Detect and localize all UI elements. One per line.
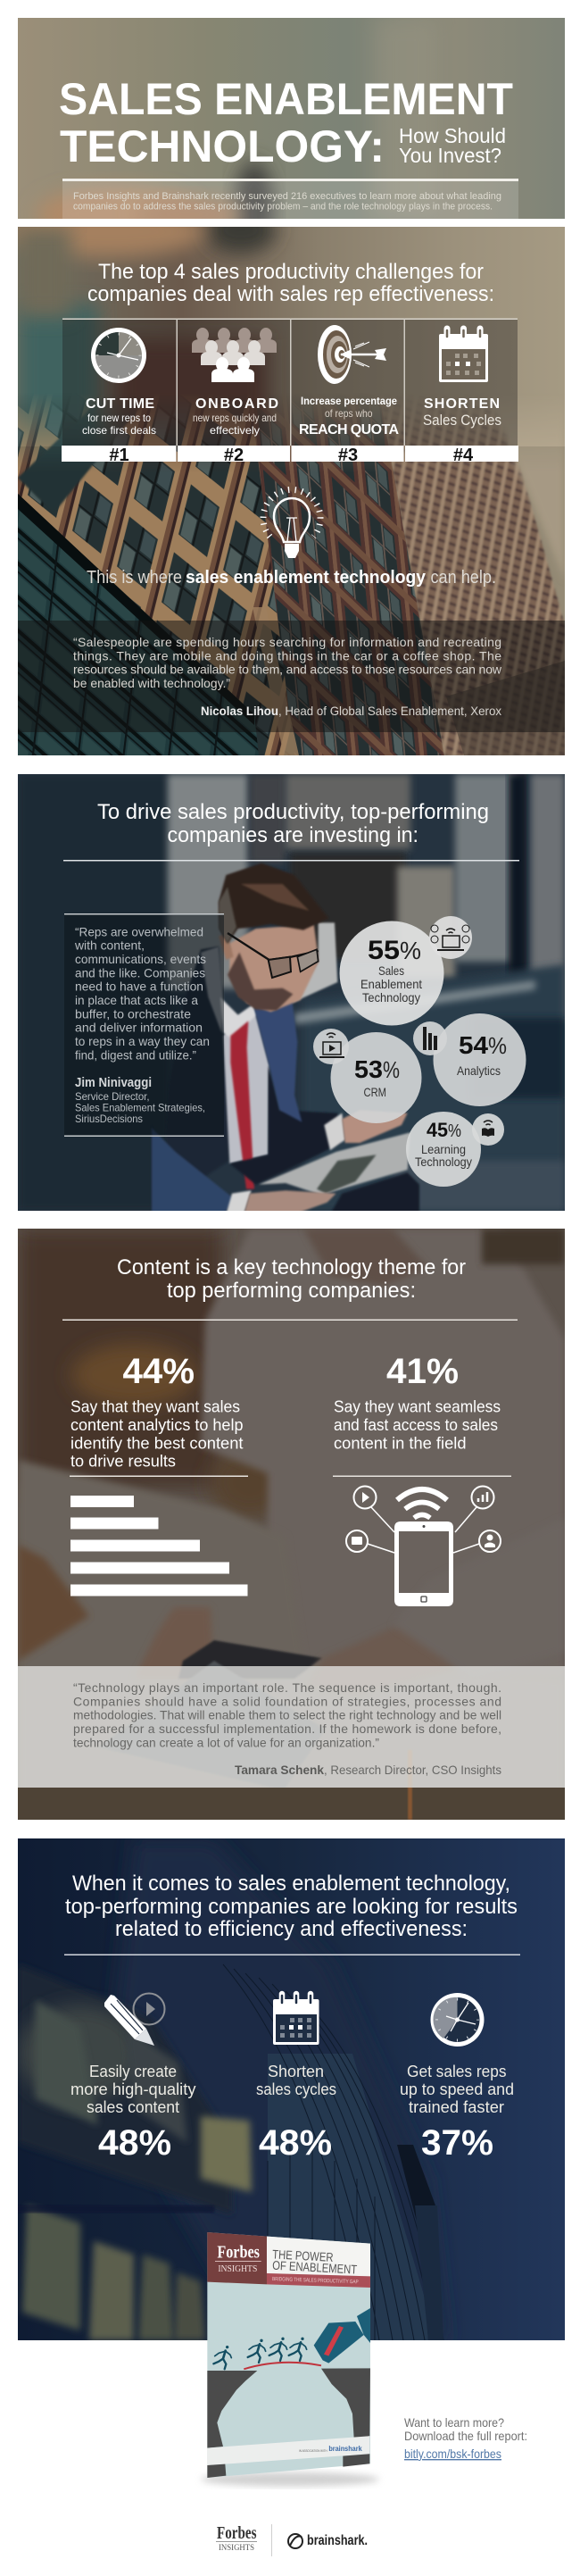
result: shorten sales cycles (256, 2063, 336, 2163)
stat bubble: 53% CRM: 53 (354, 1055, 383, 1083)
rank bar (62, 446, 518, 465)
result: easily create content (70, 2063, 196, 2163)
quote box: Jim Ninivaggi: Jim Ninivaggi (75, 1075, 152, 1090)
quote box: Jim Ninivaggi: find, digest and utilize.” (75, 1047, 196, 1062)
quote band: Tamara Schenk (18, 1666, 565, 1788)
photo: man reading (18, 774, 565, 1214)
heading: When it comes to sales enablement technology, (72, 1872, 510, 1896)
photo: glass office building at dusk (18, 1839, 446, 2340)
heading (87, 260, 494, 306)
icon: calendar (439, 329, 488, 382)
photo: man in shirt at desk (18, 1229, 565, 1820)
quote band: Nicolas Lihou (18, 621, 565, 732)
rank bar: #1 (109, 446, 129, 465)
stat: 44%: content analytics to help (70, 1416, 243, 1434)
stat: 41%: content in the field (334, 1434, 466, 1452)
stat bubble: 53% CRM (313, 1029, 421, 1123)
stat bubble: 45% learning technology: % (448, 1121, 461, 1141)
quote box: Jim Ninivaggi: and deliver information (75, 1021, 203, 1035)
column text: onboard (193, 396, 278, 437)
stat: 44%: to drive results (70, 1453, 176, 1471)
stat: 41%: and fast access to sales (334, 1416, 498, 1434)
stat: 44%: Say that they want sales (70, 1398, 240, 1416)
call to action: download the full report: Want to learn more? (404, 2415, 504, 2430)
column text: onboard: effectively (210, 424, 260, 437)
result: easily create content: 48% (98, 2123, 171, 2163)
heading (65, 1872, 518, 1941)
result: easily create content: Easily create (89, 2063, 177, 2080)
result: easily create content: more high-quality (70, 2080, 196, 2098)
intro text block (62, 179, 518, 219)
stat bubble: 55% sales enablement technology: 55 (368, 936, 400, 965)
logo: brainshark (288, 2533, 368, 2548)
icon: phone with wifi and connected content (346, 1486, 501, 1606)
stat bubble: 45% learning technology (406, 1112, 504, 1187)
call to action: download the full report (404, 2415, 527, 2461)
column text: reach quota: REACH QUOTA (299, 422, 399, 438)
call to action: download the full report: Download the full report: (404, 2429, 527, 2443)
quote band: Nicolas Lihou: resources should be available to them, and access to those resources can now (73, 663, 502, 677)
title: sales enablement technology: SALES ENABLEMENT (59, 74, 513, 124)
icon: target with arrow (318, 325, 386, 384)
stat bubble: 55% sales enablement technology: Enablement (360, 977, 422, 991)
quote band: Nicolas Lihou: be enabled with technology.” (73, 676, 230, 690)
report cover: the power of enablement: Forbes (217, 2242, 260, 2262)
column text: cut time: close first deals (82, 424, 156, 437)
icon: bar chart (423, 1027, 437, 1050)
quote band: Nicolas Lihou: Nicolas Lihou (201, 704, 278, 718)
heading: To drive sales productivity, top-performing (97, 800, 489, 824)
quote band: Tamara Schenk: Companies should have a solid foundation of strategies, processes and (73, 1694, 501, 1708)
column text: reach quota: Increase percentage (301, 395, 397, 407)
column text: shorten: SHORTEN (424, 396, 500, 412)
quote band: Nicolas Lihou: , Head of Global Sales Enablement, Xerox (278, 704, 501, 718)
quote box: Jim Ninivaggi: to reps in a way they can (75, 1034, 210, 1048)
heading: The top 4 sales productivity challenges for (98, 260, 484, 284)
stat bubble: 45% learning technology: 45 (427, 1119, 448, 1141)
panel: title header (18, 18, 565, 219)
result: reps trained faster (400, 2063, 514, 2163)
stat: 41%: 41% (386, 1352, 459, 1391)
column text: reach quota: of reps who (325, 407, 373, 420)
icon: lightbulb (263, 489, 320, 558)
heading (117, 1255, 466, 1303)
result: reps trained faster: trained faster (409, 2098, 504, 2116)
stat bubble: 55% sales enablement technology: Sales (378, 963, 404, 978)
icon: clock (430, 1993, 484, 2047)
stat: 44%: identify the best content (70, 1434, 243, 1452)
column text: shorten (423, 396, 501, 429)
column text: cut time (82, 396, 156, 437)
illustration: figures crossing the bridge (207, 2308, 370, 2448)
heading: top-performing companies are looking for results (65, 1895, 518, 1919)
quote band: Nicolas Lihou: “Salespeople are spending hours searching for information and recreating (73, 635, 501, 649)
heading: related to efficiency and effectiveness: (115, 1917, 468, 1941)
heading: companies are investing in: (168, 823, 418, 847)
quote box: Jim Ninivaggi: in place that acts like a (75, 993, 198, 1007)
result: shorten sales cycles: Shorten (268, 2063, 324, 2080)
result: shorten sales cycles: sales cycles (256, 2080, 336, 2098)
panel: results (18, 1838, 565, 2340)
photo: building (9, 207, 565, 755)
report cover: the power of enablement: brainshark (328, 2445, 362, 2453)
text: this is where sales enablement technology can help: can help. (430, 568, 496, 588)
logo: brainshark: brainshark. (307, 2533, 368, 2548)
quote box: Jim Ninivaggi: need to have a function (75, 980, 203, 994)
stat bubble: 45% learning technology: Technology (415, 1155, 472, 1169)
icon: clock (91, 328, 146, 383)
stat bubble: 55% sales enablement technology: Technology (362, 990, 420, 1005)
quote band: Nicolas Lihou: things. They are mobile and doing things in the car or a coffee shop. The (73, 648, 501, 663)
quote box: Jim Ninivaggi: buffer, to orchestrate (75, 1006, 191, 1021)
report cover: the power of enablement (201, 2232, 379, 2487)
result: reps trained faster: up to speed and (400, 2080, 514, 2098)
report cover: the power of enablement: OF ENABLEMENT (272, 2258, 358, 2277)
call to action: download the full report: bitly.com/bsk-forbes (404, 2447, 501, 2461)
logo: forbes insights: INSIGHTS (219, 2544, 254, 2553)
stat bubble: 54% analytics: % (488, 1032, 507, 1059)
report cover: the power of enablement: IN ASSOCIATION WITH (299, 2449, 327, 2453)
stat bubble: 54% analytics: 54 (459, 1031, 488, 1059)
quote band: Tamara Schenk: methodologies. That will enable them to select the right technology and be well (73, 1708, 501, 1722)
column text: cut time: for new reps to (87, 412, 151, 424)
facade lines (223, 1964, 443, 2340)
quote box: Jim Ninivaggi: Service Director, (75, 1090, 150, 1103)
stat: 41% (333, 1352, 511, 1477)
report cover: the power of enablement: BRIDGING THE SALES PRODUCTIVITY GAP (272, 2277, 359, 2285)
intro text block: Forbes Insights and Brainshark recently surveyed 216 executives to learn more about what leading (73, 191, 501, 202)
icon: book with wifi (482, 1121, 494, 1137)
stat bubble: 54% analytics: Analytics (457, 1063, 501, 1078)
text: this is where sales enablement technology can help (87, 568, 496, 588)
bar chart: content analytics (70, 1496, 248, 1596)
footer logos (216, 2523, 368, 2556)
title: sales enablement technology: TECHNOLOGY: (60, 121, 385, 171)
heading (97, 800, 489, 847)
result: shorten sales cycles: 48% (259, 2123, 332, 2163)
report cover: the power of enablement: INSIGHTS (218, 2263, 257, 2274)
icon: calendar (273, 1994, 319, 2045)
quote band: Tamara Schenk: prepared for a successful implementation. If the homework is done before, (73, 1722, 501, 1736)
heading: companies deal with sales rep effectiveness: (87, 282, 494, 306)
result: reps trained faster: 37% (421, 2123, 493, 2163)
logo: forbes insights: Forbes (217, 2523, 257, 2543)
title: sales enablement technology: How Should (399, 124, 506, 147)
quote box: Jim Ninivaggi: “Reps are overwhelmed (75, 924, 203, 938)
icon: laptop with connections (431, 925, 469, 950)
stat bubble: 53% CRM: % (383, 1056, 400, 1083)
quote box: Jim Ninivaggi: Sales Enablement Strategies, (75, 1102, 205, 1114)
panel: investing in (18, 774, 565, 1214)
rank bar: #2 (224, 446, 244, 465)
title: sales enablement technology: You Invest? (399, 144, 501, 167)
quote box: Jim Ninivaggi: and the like. Companies (75, 965, 205, 980)
quote band: Tamara Schenk: , Research Director, CSO Insights (324, 1763, 501, 1777)
column text: cut time: CUT TIME (86, 396, 154, 412)
heading: top performing companies: (167, 1279, 416, 1303)
report cover: the power of enablement: THE POWER (272, 2247, 334, 2264)
stat bubble: 55% sales enablement technology (339, 916, 472, 1025)
column text: onboard: ONBOARD (195, 396, 278, 412)
stat bubble: 45% learning technology: Learning (421, 1142, 466, 1156)
panel: content theme (18, 1229, 565, 1820)
stat bubble: 55% sales enablement technology: % (400, 937, 421, 964)
figure: man in suit (152, 863, 419, 1214)
quote box: Jim Ninivaggi (64, 913, 224, 1137)
logo: forbes insights (216, 2523, 257, 2553)
column text: onboard: new reps quickly and (193, 412, 277, 424)
rank bar: #4 (453, 446, 474, 465)
rank bar: #3 (338, 446, 358, 465)
icon: people group (192, 328, 277, 382)
title: sales enablement technology (59, 74, 513, 171)
quote band: Tamara Schenk: “Technology plays an important role. The sequence is important, though. (73, 1680, 501, 1695)
icon: pencil and play (104, 1993, 164, 2046)
stat bubble: 54% analytics (413, 1013, 526, 1106)
text: this is where sales enablement technology can help: sales enablement technology (186, 568, 427, 588)
intro text block: companies do to address the sales productivity problem – and the role technology plays in the process. (73, 202, 493, 213)
icon: laptop play (319, 1033, 344, 1057)
quote box: Jim Ninivaggi: SiriusDecisions (75, 1113, 143, 1125)
column text: reach quota (299, 395, 399, 438)
result: easily create content: sales content (87, 2098, 179, 2116)
challenges table (62, 318, 518, 465)
column text: shorten: Sales Cycles (423, 412, 501, 429)
stat: 44% (70, 1352, 248, 1477)
quote band: Tamara Schenk: technology can create a lot of value for an organization.” (73, 1735, 379, 1749)
quote box: Jim Ninivaggi: with content, (74, 938, 145, 953)
text: this is where sales enablement technology can help: This is where (87, 568, 182, 588)
heading: Content is a key technology theme for (117, 1255, 466, 1280)
stat bubble: 53% CRM: CRM (364, 1085, 386, 1099)
stat: 41%: Say they want seamless (334, 1398, 501, 1416)
quote band: Tamara Schenk: Tamara Schenk (235, 1763, 324, 1777)
stat: 44%: 44% (123, 1352, 195, 1391)
quote box: Jim Ninivaggi: communications, events (75, 952, 206, 966)
result: reps trained faster: Get sales reps (407, 2063, 507, 2080)
